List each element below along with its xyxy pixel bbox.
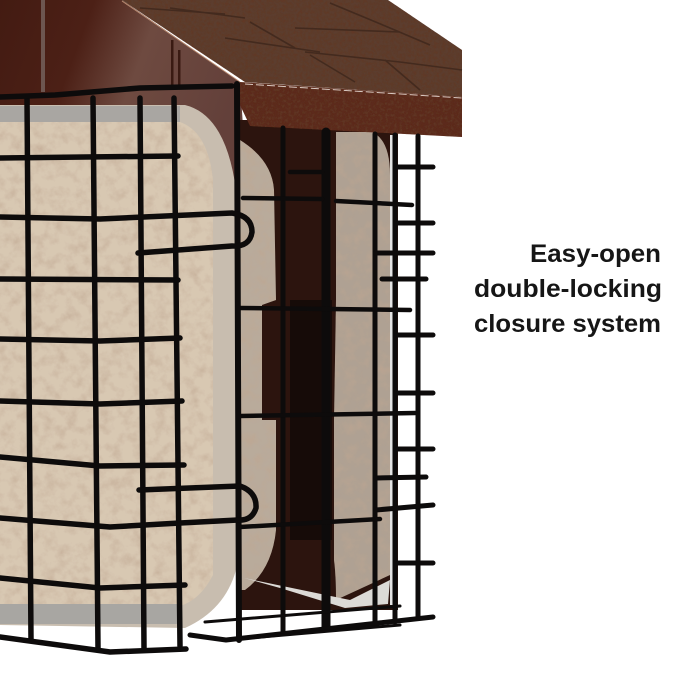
caption: easy-open double-locking closure system: Easy-open — [530, 240, 661, 268]
panel: right suet blocks — [240, 132, 395, 608]
caption: easy-open double-locking closure system — [474, 240, 662, 338]
bottom frame — [190, 606, 433, 640]
caption: easy-open double-locking closure system: closure system — [474, 310, 661, 338]
panel: front suet cake in clear tray — [0, 105, 236, 628]
door frame post — [237, 84, 239, 640]
right side rungs — [375, 167, 433, 563]
panel: feeder back wall — [0, 0, 248, 200]
side vertical bars — [283, 128, 418, 633]
front vertical bars — [27, 98, 180, 648]
panel: feeder interior — [238, 120, 398, 610]
side horizontal bars — [240, 172, 415, 527]
roof top shingles — [122, 0, 462, 97]
wire cage: front door grid — [0, 84, 256, 652]
front horizontal bars — [0, 86, 232, 652]
lower latch loop — [139, 486, 256, 523]
central thick post — [322, 132, 330, 628]
caption: easy-open double-locking closure system: double-locking — [474, 275, 662, 303]
wire cage: side grid — [190, 128, 433, 640]
panel: feeder roof — [122, 0, 462, 137]
upper latch loop — [0, 213, 252, 253]
roof front fascia — [240, 82, 462, 137]
